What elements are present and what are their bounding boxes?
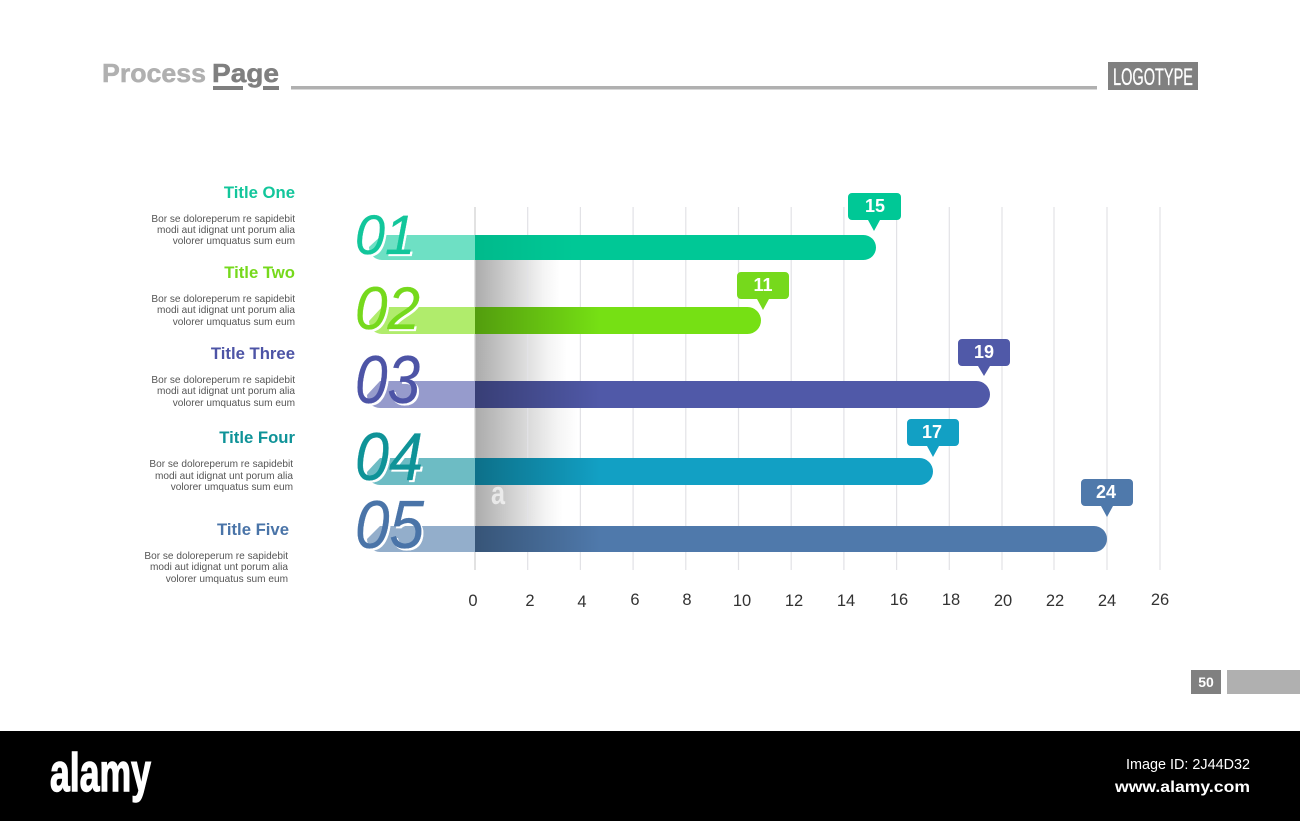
- row 4 description: Bor se doloreperum re sapidebit: [149, 459, 293, 470]
- row 2 value callout: [737, 272, 789, 310]
- row 1: [151, 183, 901, 266]
- x axis labels: 8: [682, 591, 692, 609]
- x axis labels: 24: [1098, 592, 1116, 610]
- row 4 value callout: [907, 419, 959, 457]
- row 2 number: 02: [355, 275, 420, 342]
- row 3: [151, 339, 1010, 418]
- page tab: [1227, 670, 1300, 694]
- watermark glyph in shadow: a: [491, 475, 505, 511]
- footer logo: alamy: [50, 743, 151, 803]
- row 2 description: Title Two: [224, 263, 295, 282]
- logotype: LOGOTYPE: [1113, 64, 1193, 91]
- x axis labels: 6: [630, 591, 640, 609]
- row 1 description: Title One: [224, 183, 295, 202]
- x axis labels: 4: [577, 593, 587, 611]
- header title: Process: [102, 58, 206, 88]
- x axis labels: 26: [1151, 591, 1169, 609]
- row 2 description: volorer umquatus sum eum: [173, 317, 295, 328]
- row 4 description: [149, 428, 295, 493]
- x axis labels: 22: [1046, 592, 1064, 610]
- row 4 bar, value 17: [367, 458, 933, 485]
- row 3 value callout: 19: [974, 342, 994, 362]
- row 5 value callout: 24: [1096, 482, 1116, 502]
- row 1 bar, value 15: [369, 235, 876, 260]
- x axis labels: 2: [525, 592, 535, 610]
- row 2 value callout: 11: [753, 275, 773, 295]
- row 2 bar, value 11: [369, 307, 761, 334]
- page number: [1191, 670, 1221, 694]
- header rule: [291, 86, 1097, 90]
- row 5 value callout: [1081, 479, 1133, 517]
- row 3 description: Title Three: [211, 344, 295, 363]
- row 5 number: 05: [355, 487, 424, 563]
- page number: 50: [1198, 674, 1214, 690]
- x axis labels: 0: [468, 592, 478, 610]
- row 3 description: volorer umquatus sum eum: [173, 398, 295, 409]
- x axis labels: 10: [733, 592, 751, 610]
- row 1 value callout: [848, 193, 901, 231]
- row 4 number: 04: [355, 419, 423, 495]
- row 4: [149, 419, 959, 495]
- row 5 description: Bor se doloreperum re sapidebit: [144, 551, 288, 562]
- row 5: [144, 479, 1133, 585]
- row 5 description: Title Five: [217, 520, 289, 539]
- row 2 description: [151, 263, 295, 328]
- row 4 description: Title Four: [219, 428, 295, 447]
- row 4 value callout: 17: [922, 422, 942, 442]
- row 1 value callout: 15: [865, 196, 885, 216]
- chart grid lines: [475, 207, 1160, 570]
- row 3 description: [151, 344, 295, 409]
- row 2 description: modi aut idignat unt porum alia: [157, 305, 295, 316]
- x axis labels: 18: [942, 591, 960, 609]
- row 2: [151, 263, 789, 342]
- row 1 number: 01: [355, 203, 415, 266]
- x axis labels: 20: [994, 592, 1012, 610]
- website: www.alamy.com: [1114, 779, 1250, 796]
- row 5 description: modi aut idignat unt porum alia: [150, 562, 288, 573]
- row 3 number: 03: [355, 342, 420, 418]
- row 1 description: modi aut idignat unt porum alia: [157, 225, 295, 236]
- x axis labels: 16: [890, 591, 908, 609]
- row 5 description: volorer umquatus sum eum: [166, 574, 288, 585]
- row 1 description: Bor se doloreperum re sapidebit: [151, 214, 295, 225]
- row 4 description: modi aut idignat unt porum alia: [155, 471, 293, 482]
- row 1 description: volorer umquatus sum eum: [173, 236, 295, 247]
- row 5 bar, value 24: [367, 526, 1107, 552]
- row 3 description: Bor se doloreperum re sapidebit: [151, 375, 295, 386]
- header title: Page: [212, 58, 279, 88]
- row 3 description: modi aut idignat unt porum alia: [157, 386, 295, 397]
- row 3 value callout: [958, 339, 1010, 376]
- image id: Image ID: 2J44D32: [1126, 756, 1250, 773]
- x axis labels: 14: [837, 592, 855, 610]
- row 1 description: [151, 183, 295, 247]
- row 2 description: Bor se doloreperum re sapidebit: [151, 294, 295, 305]
- row 3 bar, value 19: [367, 381, 990, 408]
- row 4 description: volorer umquatus sum eum: [171, 482, 293, 493]
- footer band: [0, 731, 1300, 821]
- shadow behind bars: [475, 260, 578, 526]
- x axis labels: [468, 591, 1169, 611]
- header title: [102, 58, 279, 90]
- x axis labels: 12: [785, 592, 803, 610]
- row 5 description: [144, 520, 289, 585]
- logotype: [1108, 62, 1198, 91]
